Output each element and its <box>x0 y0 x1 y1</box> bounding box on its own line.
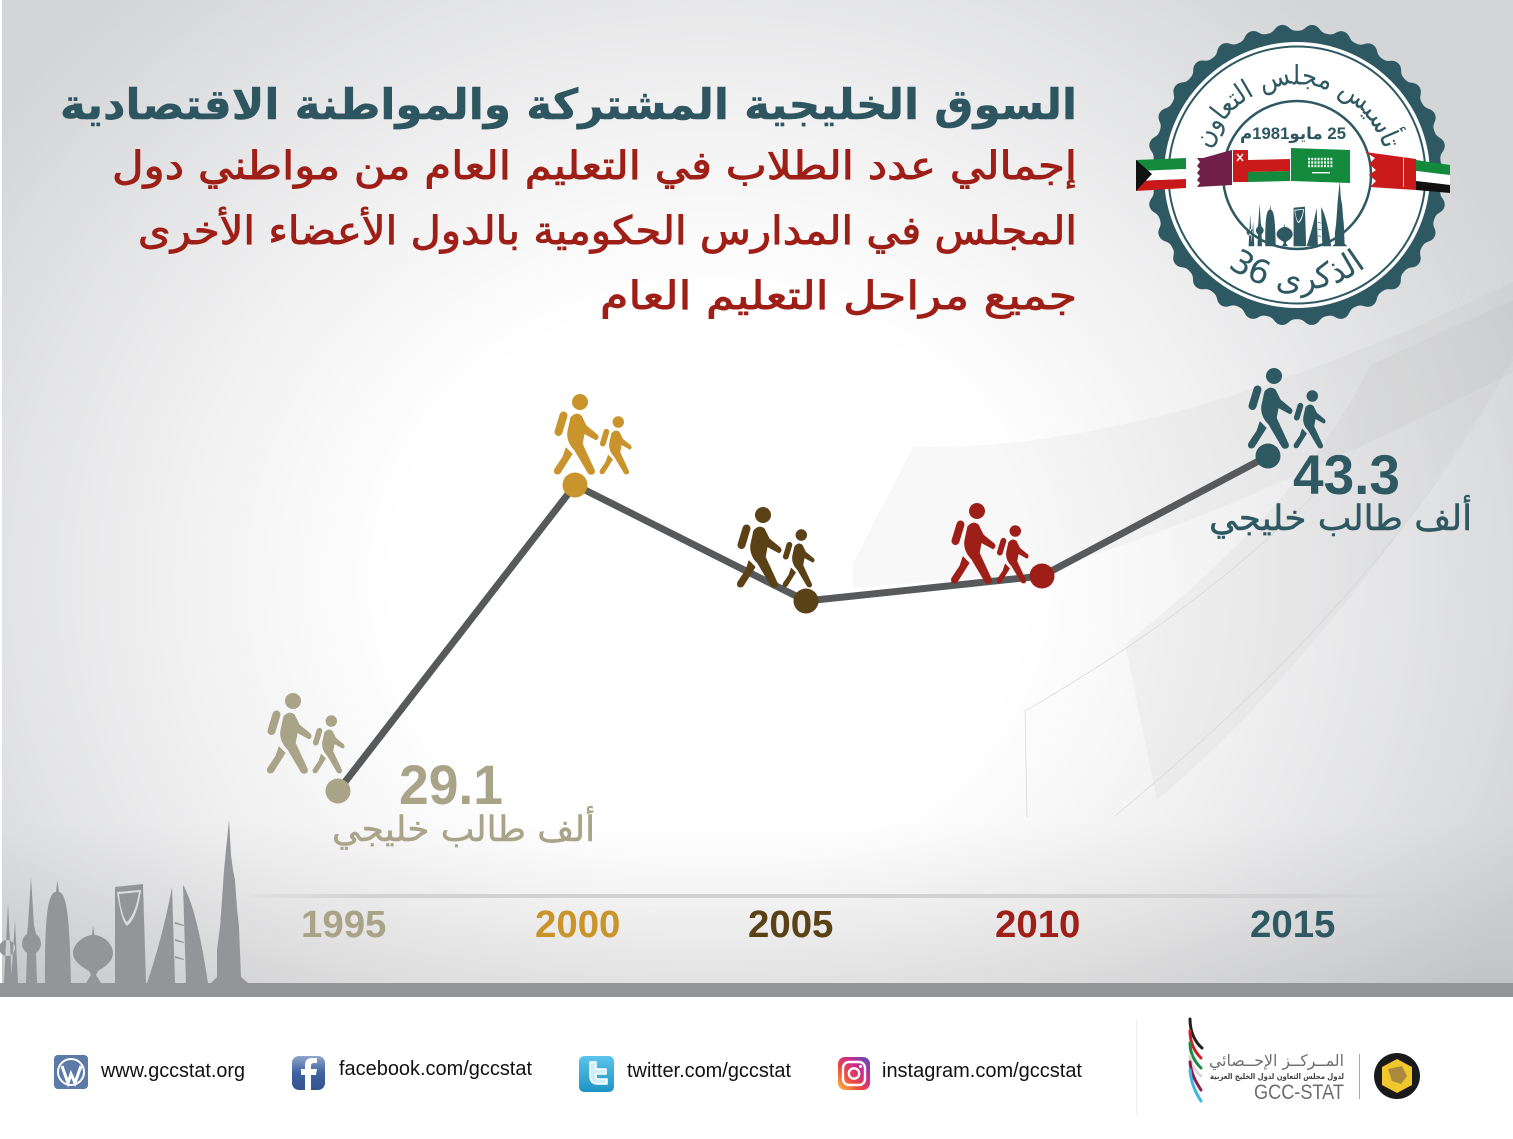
x axis: 2005 <box>748 903 833 946</box>
seal skyline <box>1247 181 1347 246</box>
footer: facebook <box>292 1056 532 1090</box>
line chart <box>338 456 1268 791</box>
subtitle: إجمالي عدد الطلاب في التعليم العام من مواطني دول <box>112 144 1077 189</box>
subtitle: جميع مراحل التعليم العام <box>600 274 1077 319</box>
seal arc text top: تأسيس مجلس التعاون <box>1201 64 1406 148</box>
flag: Kuwait <box>1136 158 1186 191</box>
point 1995 <box>268 693 350 804</box>
seal arc text bottom: الذكرى 36 <box>1230 248 1364 298</box>
value label 2015 <box>1209 443 1472 539</box>
logo ribbons <box>1190 1019 1202 1101</box>
footer divider <box>1136 1020 1137 1115</box>
footer: twitter <box>579 1056 791 1092</box>
flag: Bahrain <box>1365 152 1416 190</box>
point 2005 <box>738 507 818 614</box>
subtitle: المجلس في المدارس الحكومية بالدول الأعضاء الأخرى <box>138 206 1077 254</box>
icon: wordpress <box>54 1055 88 1089</box>
footer: website <box>54 1055 245 1089</box>
value label 1995: 29.1 <box>399 753 503 816</box>
x axis: 1995 <box>301 903 386 946</box>
logo Arabic subtitle: لدول مجلس التعاون لدول الخليج العربية <box>1210 1072 1344 1082</box>
value label 2015: ألف طالب خليجي <box>1209 495 1472 539</box>
x axis: 2010 <box>995 903 1080 946</box>
value label 2015: 43.3 <box>1293 443 1400 506</box>
badge: 36th anniversary seal <box>1136 24 1450 325</box>
value label 1995 <box>332 753 595 850</box>
logo: GCC-STAT <box>1190 1019 1420 1104</box>
logo Latin name: GCC-STAT <box>1254 1081 1344 1104</box>
x axis: 2015 <box>1250 903 1335 946</box>
skyline and ground band <box>0 820 1513 997</box>
x axis <box>250 894 1420 946</box>
logo emblem <box>1374 1053 1420 1099</box>
point 2000 <box>554 394 631 498</box>
footer: instagram: instagram.com/gccstat <box>882 1060 1082 1082</box>
flag: Qatar <box>1197 150 1232 187</box>
seal rings <box>1164 42 1430 308</box>
subtitle <box>112 144 1077 319</box>
logo Arabic name: المــركــز الإحــصائي <box>1209 1051 1344 1071</box>
footer: facebook: facebook.com/gccstat <box>339 1058 532 1080</box>
value label 1995: ألف طالب خليجي <box>332 806 595 850</box>
flag: Saudi Arabia <box>1291 148 1350 183</box>
seal scalloped edge <box>1153 31 1441 319</box>
footer: instagram <box>838 1057 1082 1090</box>
flag: Oman <box>1233 150 1290 182</box>
title: السوق الخليجية المشتركة والمواطنة الاقتصادية <box>60 80 1077 130</box>
point 2015 <box>1248 368 1325 468</box>
icon: facebook <box>292 1056 325 1090</box>
footer: website: www.gccstat.org <box>100 1060 245 1082</box>
seal date: 25 مايو1981م <box>1240 125 1346 144</box>
icon: twitter <box>579 1056 614 1092</box>
footer: twitter: twitter.com/gccstat <box>627 1060 791 1082</box>
icon: instagram <box>838 1057 870 1090</box>
flag: UAE <box>1416 160 1450 193</box>
point 2010 <box>952 503 1054 588</box>
x axis: 2000 <box>535 903 620 946</box>
